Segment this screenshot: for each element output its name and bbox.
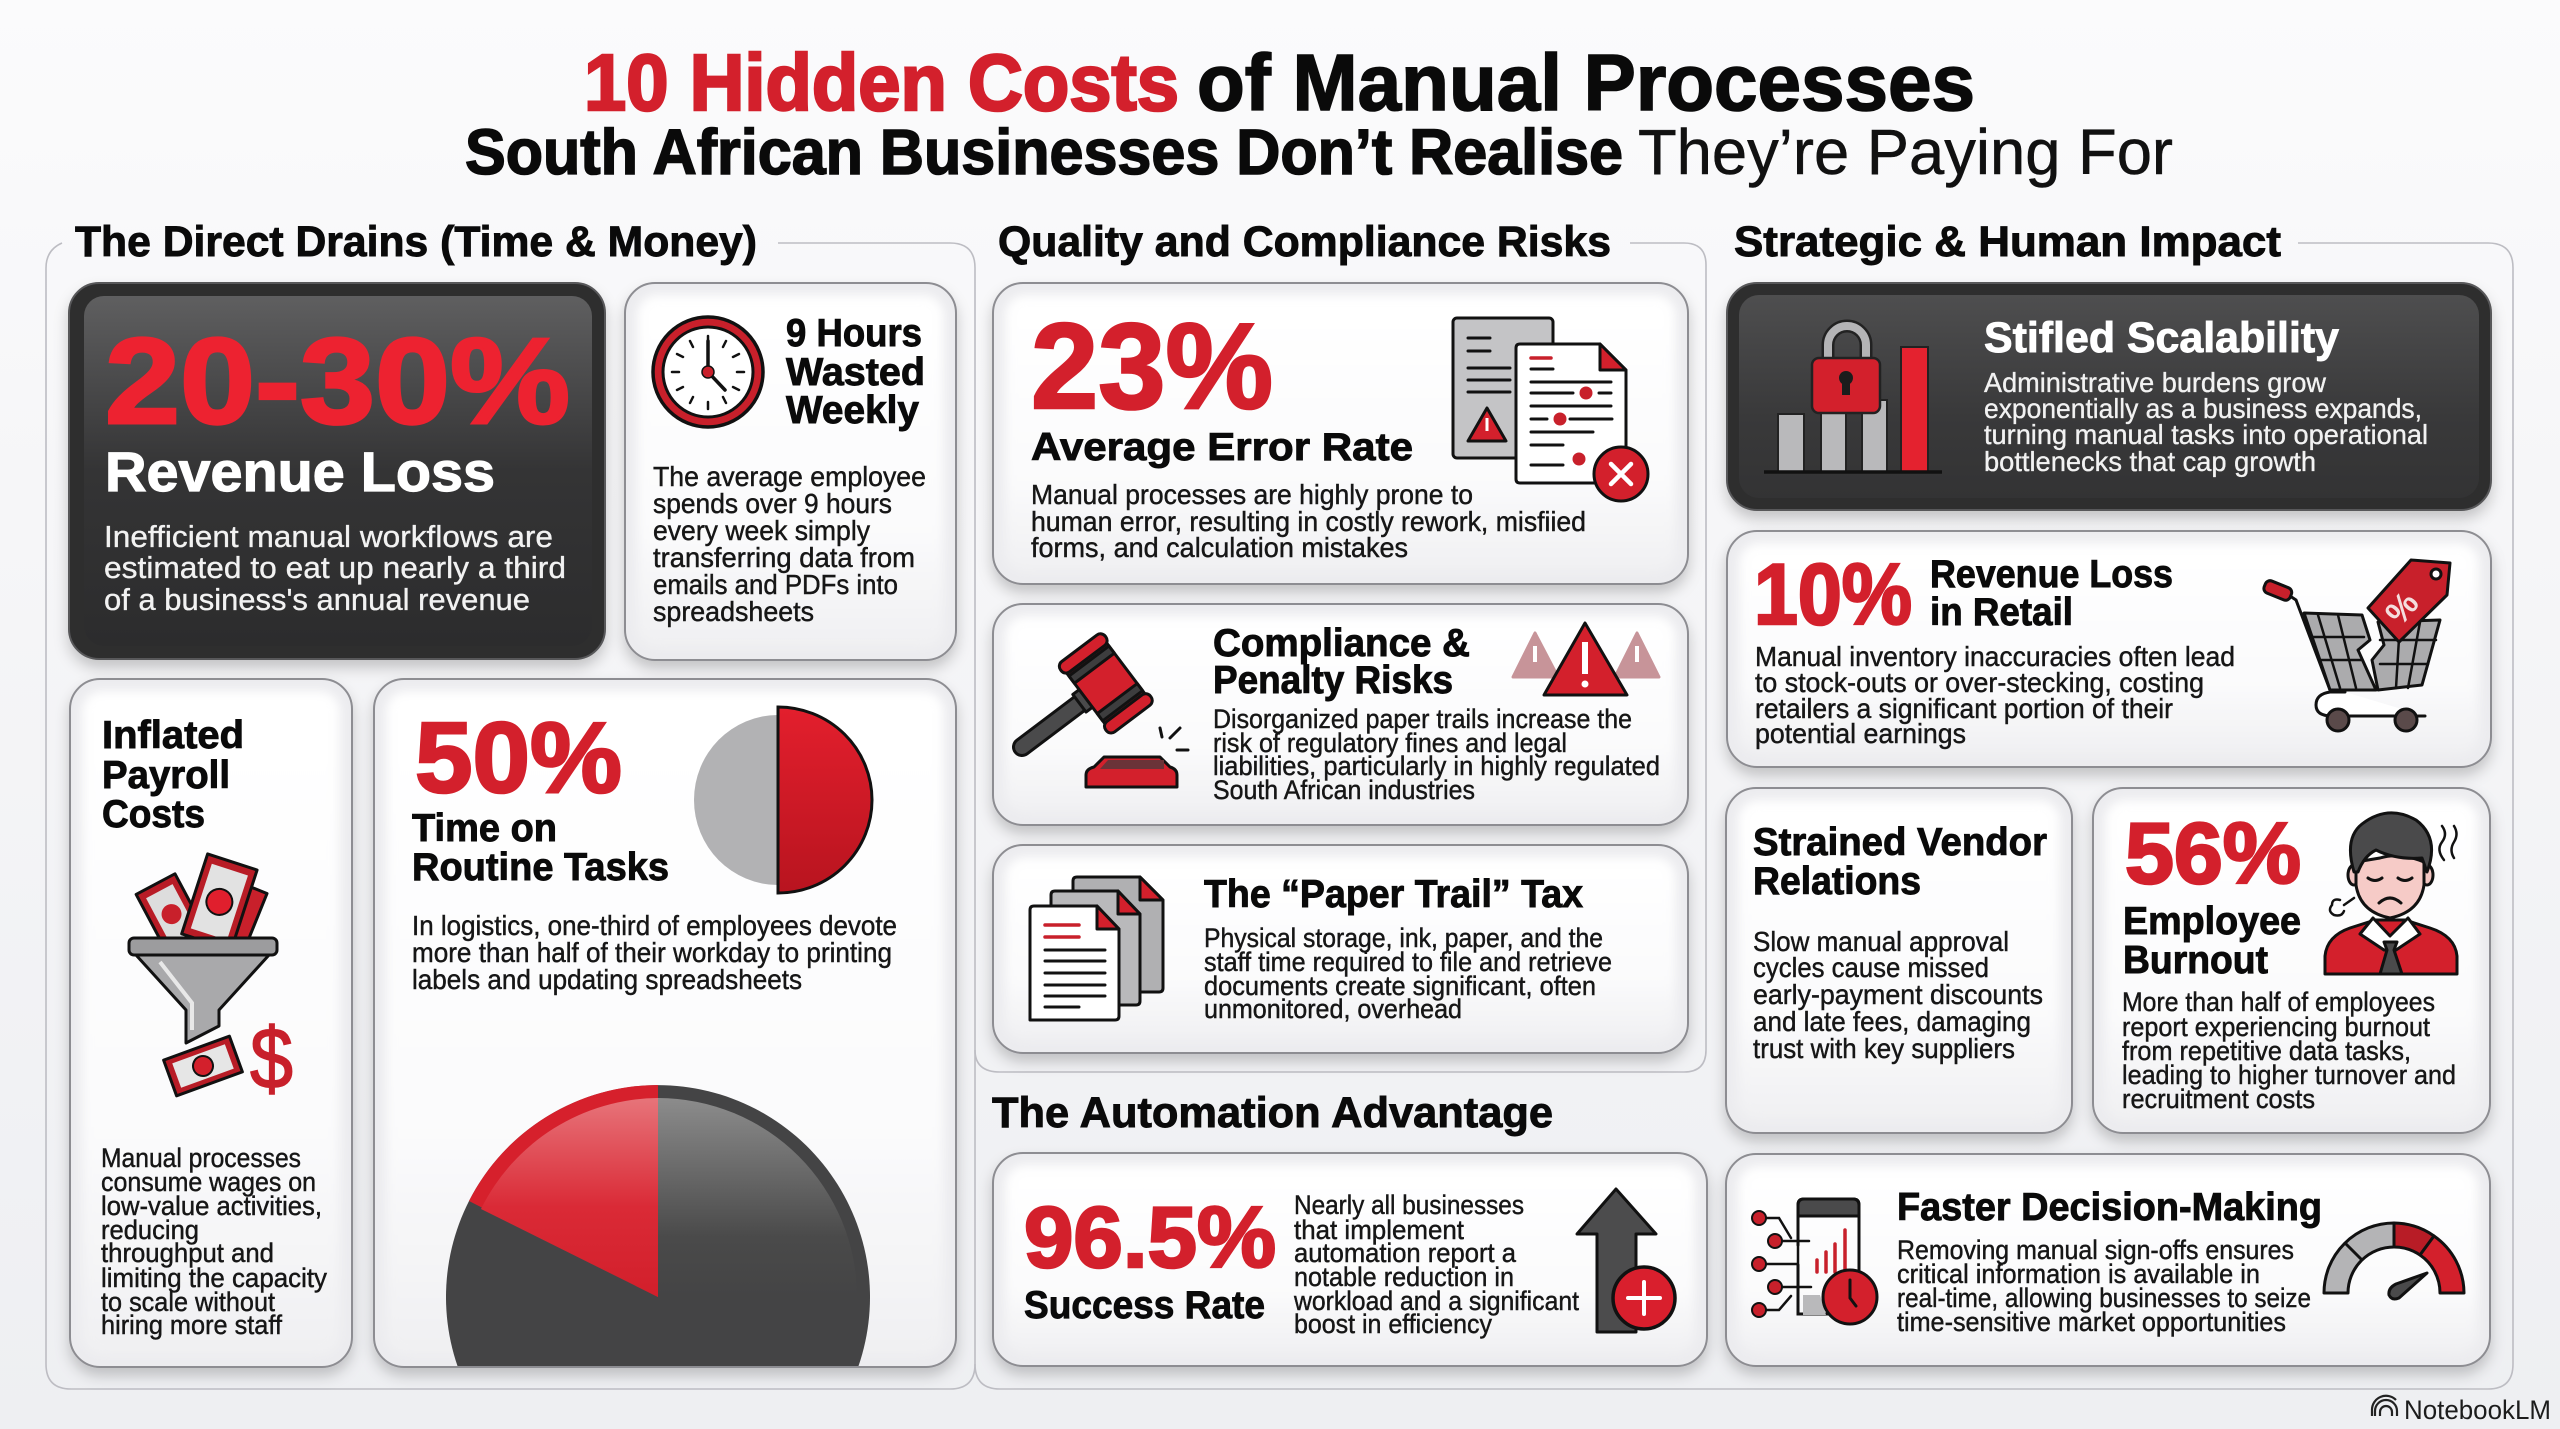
heading — [102, 714, 244, 836]
description: critical information is available in — [1897, 1259, 2260, 1289]
icon: locked bar chart — [1764, 326, 1942, 472]
heading: strategic and human: Strategic & Human Impact — [1734, 218, 2281, 266]
description: and late fees, damaging — [1753, 1006, 2031, 1037]
stat: 96.5%: 96.5% — [1024, 1190, 1276, 1286]
description — [653, 461, 926, 627]
description — [412, 910, 897, 995]
description: risk of regulatory fines and legal — [1213, 728, 1567, 758]
section frames — [46, 243, 2513, 1389]
panel: revenue loss — [69, 283, 605, 659]
description: Inefficient manual workflows are — [104, 519, 553, 554]
description: more than half of their workday to printing — [412, 937, 892, 968]
description: consume wages on — [101, 1167, 316, 1197]
icon: gavel — [1022, 631, 1188, 787]
description: boost in efficiency — [1294, 1309, 1492, 1339]
description: spends over 9 hours — [653, 488, 892, 519]
icon: document stack — [1030, 877, 1163, 1020]
panel: employee burnout — [2093, 788, 2490, 1133]
description: unmonitored, overhead — [1204, 994, 1462, 1024]
description: time-sensitive market opportunities — [1897, 1307, 2286, 1337]
chart: half pie — [694, 707, 872, 893]
icon text: percent: % — [2378, 585, 2427, 632]
panel: faster decision-making — [1726, 1154, 2490, 1366]
label: Employee — [2123, 900, 2301, 943]
description: The average employee — [653, 461, 926, 492]
description: emails and PDFs into — [653, 569, 898, 600]
label: Revenue Loss — [1930, 553, 2173, 596]
description: Removing manual sign-offs ensures — [1897, 1235, 2294, 1265]
description: Slow manual approval — [1753, 926, 2009, 957]
heading — [1753, 821, 2047, 903]
description: bottlenecks that cap growth — [1984, 446, 2316, 477]
description: labels and updating spreadsheets — [412, 964, 802, 995]
panel: paper trail tax — [993, 845, 1688, 1053]
description: Disorganized paper trails increase the — [1213, 704, 1632, 734]
panel: 9 hours wasted weekly — [625, 283, 956, 660]
heading: Weekly — [786, 389, 919, 432]
description: Nearly all businesses — [1294, 1190, 1524, 1220]
panel: 23% average error rate — [993, 283, 1688, 584]
description — [2122, 987, 2456, 1114]
title: They’re Paying For — [1638, 116, 2173, 188]
heading: Costs — [102, 793, 205, 836]
description — [1984, 367, 2428, 477]
heading: Compliance & — [1213, 622, 1470, 665]
panel: 10% revenue loss in retail — [1727, 531, 2491, 767]
description: potential earnings — [1755, 718, 1966, 749]
description: forms, and calculation mistakes — [1031, 532, 1408, 563]
description: liabilities, particularly in highly regulated — [1213, 751, 1660, 781]
icon: dashboard with clock — [1752, 1199, 1877, 1324]
label — [412, 807, 669, 889]
heading: 9 Hours — [786, 312, 922, 355]
description: notable reduction in — [1294, 1262, 1514, 1292]
description: throughput and — [101, 1238, 274, 1268]
icon: money funnel — [129, 854, 293, 1107]
heading: Penalty Risks — [1213, 659, 1453, 702]
label: in Retail — [1930, 591, 2073, 634]
heading: Inflated — [102, 714, 244, 757]
description: retailers a significant portion of their — [1755, 693, 2173, 724]
description: that implement — [1294, 1215, 1464, 1245]
description — [1213, 704, 1660, 805]
description: exponentially as a business expands, — [1984, 393, 2422, 424]
description: Manual processes are highly prone to — [1031, 479, 1473, 510]
description: Manual processes — [101, 1143, 301, 1173]
heading: Faster Decision-Making — [1897, 1186, 2322, 1229]
label: Success Rate — [1024, 1284, 1265, 1327]
panel: inflated payroll costs — [70, 679, 352, 1367]
description: transferring data from — [653, 542, 915, 573]
description: spreadsheets — [653, 596, 814, 627]
description — [1897, 1235, 2311, 1337]
label: Burnout — [2123, 939, 2268, 982]
heading: Stifled Scalability — [1984, 314, 2339, 362]
panel: strained vendor relations — [1726, 788, 2072, 1133]
description: staff time required to file and retrieve — [1204, 947, 1612, 977]
icon: shopping cart with price tag — [2262, 560, 2450, 731]
label: revenue loss: Revenue Loss — [105, 440, 495, 503]
description: to scale without — [101, 1287, 275, 1317]
description: recruitment costs — [2122, 1084, 2315, 1114]
panel: stifled scalability — [1727, 283, 2491, 510]
description: estimated to eat up nearly a third — [104, 550, 566, 585]
description: Manual inventory inaccuracies often lead — [1755, 641, 2235, 672]
description — [1204, 923, 1612, 1024]
description: trust with key suppliers — [1753, 1033, 2015, 1064]
brand: NotebookLM: NotebookLM — [2404, 1395, 2551, 1425]
heading: The “Paper Trail” Tax — [1204, 873, 1583, 916]
stat: 10%: 10% — [1754, 547, 1912, 643]
description: real-time, allowing businesses to seize — [1897, 1283, 2311, 1313]
description: limiting the capacity — [101, 1263, 327, 1293]
icon: burned-out employee — [2325, 813, 2457, 974]
heading: Relations — [1753, 860, 1921, 903]
description: to stock-outs or over-stecking, costing — [1755, 667, 2204, 698]
description: low-value activities, — [101, 1191, 322, 1221]
label: Routine Tasks — [412, 846, 669, 889]
description: documents create significant, often — [1204, 971, 1596, 1001]
heading — [786, 312, 925, 432]
description: In logistics, one-third of employees devote — [412, 910, 897, 941]
title — [465, 38, 2173, 188]
panel: 50% time on routine tasks — [374, 679, 956, 1367]
description — [1755, 641, 2235, 749]
description — [1031, 479, 1586, 563]
label — [1930, 553, 2173, 634]
title: 10 Hidden Costs — [584, 38, 1179, 127]
description: cycles cause missed — [1753, 952, 1989, 983]
label: Average Error Rate — [1031, 426, 1413, 469]
description: leading to higher turnover and — [2122, 1060, 2456, 1090]
icon: arrow up with plus — [1577, 1189, 1675, 1332]
heading: Strained Vendor — [1753, 821, 2047, 864]
description: automation report a — [1294, 1238, 1517, 1268]
heading: automation advantage: The Automation Advantage — [992, 1089, 1553, 1137]
description — [104, 519, 566, 617]
stat: 20-30%: 20-30% — [105, 313, 570, 449]
description: hiring more staff — [101, 1310, 282, 1340]
description: human error, resulting in costly rework, misfiied — [1031, 506, 1586, 537]
label: Time on — [412, 807, 557, 850]
description: report experiencing burnout — [2122, 1012, 2430, 1042]
description — [1753, 926, 2043, 1064]
description: reducing — [101, 1215, 199, 1245]
stat: 56%: 56% — [2125, 806, 2301, 902]
icon: gauge — [2324, 1223, 2464, 1299]
icon text: dollar: $ — [250, 1011, 293, 1107]
description: from repetitive data tasks, — [2122, 1036, 2411, 1066]
label — [2123, 900, 2301, 982]
panel: 96.5% success rate — [993, 1153, 1707, 1366]
description: early-payment discounts — [1753, 979, 2043, 1010]
description: Administrative burdens grow — [1984, 367, 2327, 398]
heading — [1213, 622, 1470, 702]
icon: error documents — [1453, 318, 1648, 501]
description — [1293, 1190, 1579, 1339]
description: of a business's annual revenue — [104, 582, 530, 617]
heading: quality and compliance: Quality and Compliance Risks — [998, 218, 1611, 266]
panel: compliance and penalty risks — [993, 604, 1688, 825]
description: South African industries — [1213, 775, 1475, 805]
icon: warning triangles — [1513, 623, 1659, 695]
stat: 23%: 23% — [1031, 298, 1273, 434]
heading: Payroll — [102, 754, 230, 797]
description: turning manual tasks into operational — [1984, 419, 2428, 450]
chart: large pie — [446, 1085, 870, 1366]
icon: clock — [653, 317, 763, 427]
description: every week simply — [653, 515, 870, 546]
description: Physical storage, ink, paper, and the — [1204, 923, 1603, 953]
stat: 50%: 50% — [415, 702, 622, 814]
title: of Manual Processes — [1197, 38, 1975, 127]
description: workload and a significant — [1293, 1286, 1579, 1316]
heading: Wasted — [786, 351, 925, 394]
heading: direct drains: The Direct Drains (Time & Money) — [75, 218, 757, 266]
description — [101, 1143, 327, 1340]
description: More than half of employees — [2122, 987, 2435, 1017]
title: South African Businesses Don’t Realise — [465, 116, 1623, 188]
